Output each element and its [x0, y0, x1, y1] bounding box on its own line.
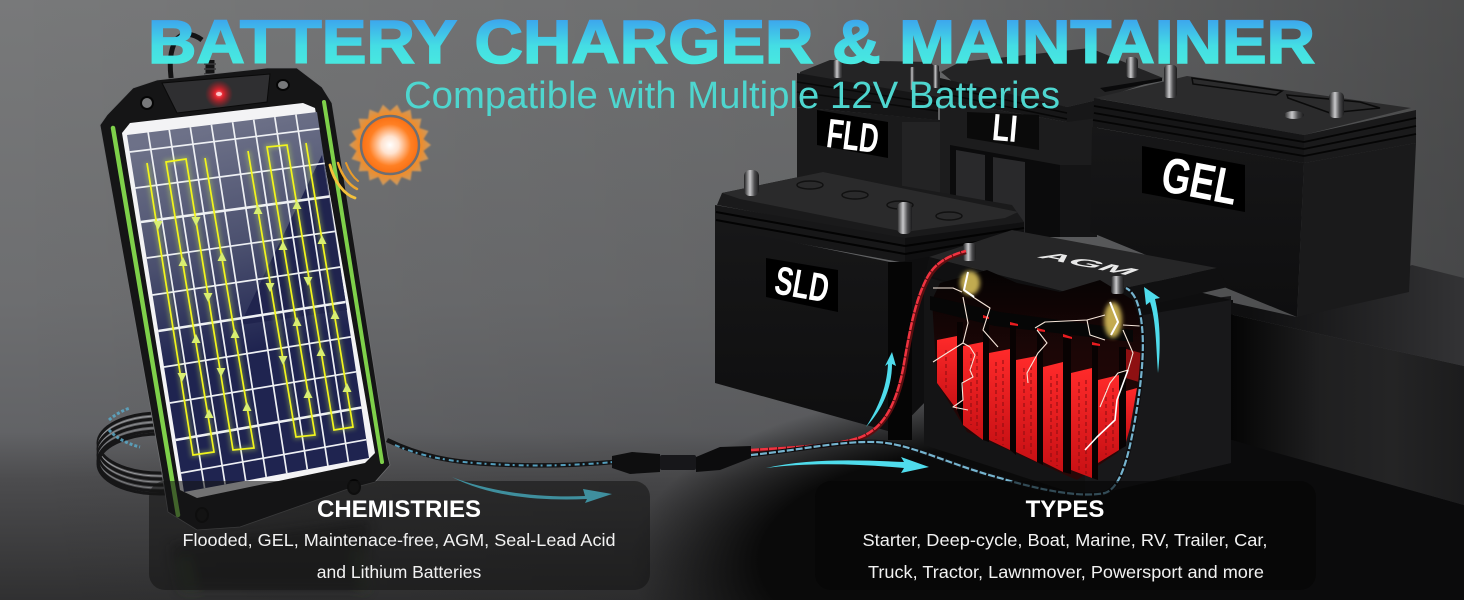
- diagonal dark reflection: [240, 155, 347, 325]
- frame: [100, 68, 390, 530]
- cable: blue: [751, 288, 1143, 495]
- text: chemistries second line: and Lithium Batteries: [317, 562, 481, 582]
- battery: LI: [940, 48, 1163, 237]
- heading: chemistries: CHEMISTRIES: [317, 496, 481, 523]
- lightning: [933, 271, 1140, 450]
- label: SLD: SLD: [772, 259, 832, 311]
- solar cells: [127, 112, 369, 492]
- solar panel: [100, 34, 390, 530]
- arrow: cyan up blue cable: [1144, 287, 1160, 373]
- battery: SLD: [715, 170, 1024, 440]
- battery: FLD: [797, 60, 940, 235]
- plate traces: [946, 350, 1113, 474]
- label: LI: LI: [991, 107, 1019, 151]
- text: types second line: Truck, Tractor, Lawnmover, Powersport and more: [868, 562, 1264, 582]
- green side strips: [113, 102, 382, 515]
- title: BATTERY CHARGER & MAINTAINER: [148, 8, 1315, 76]
- yellow circuit lines: [147, 143, 353, 455]
- label: SLD: [766, 258, 838, 312]
- text: chemistries list: Flooded, GEL, Maintenace-free, AGM, Seal-Lead Acid: [182, 530, 616, 550]
- corner mount holes: [141, 80, 360, 522]
- cell grid: [130, 115, 366, 488]
- panel reflection: [170, 520, 370, 590]
- box background: [815, 481, 1316, 590]
- terminals: AGM: [963, 243, 1124, 294]
- arrow: cyan up red cable: [866, 352, 896, 427]
- subtitle: Compatible with Multiple 12V Batteries: [404, 75, 1060, 117]
- label: LI: [967, 107, 1039, 151]
- connector: [612, 446, 751, 474]
- panel: chemistries: [149, 477, 650, 590]
- top band with LED: [162, 74, 270, 113]
- box background: [149, 481, 650, 590]
- white glass border: [122, 103, 375, 498]
- cutaway interior: [930, 270, 1142, 480]
- terminals: FLD: [833, 60, 939, 90]
- cords at top: [170, 34, 216, 84]
- cable coil behind panel: [98, 408, 222, 494]
- label: AGM: AGM: [1031, 250, 1146, 277]
- label: FLD: [817, 110, 888, 162]
- icon: sun: [349, 105, 431, 185]
- cable: red: [751, 251, 966, 451]
- red slivers: [983, 315, 1100, 346]
- label: GEL: [1142, 146, 1245, 216]
- terminals: GEL: [1164, 65, 1344, 119]
- label: FLD: FLD: [824, 110, 881, 162]
- battery: AGM cutaway: [924, 230, 1231, 497]
- text: types list: Starter, Deep-cycle, Boat, Marine, RV, Trailer, Car,: [862, 530, 1268, 550]
- red plates: [937, 336, 1137, 478]
- arrowheads on circuit: [154, 200, 352, 418]
- terminal: LI: [1100, 57, 1162, 92]
- panel: types: [815, 481, 1316, 590]
- label: GEL: GEL: [1157, 146, 1242, 216]
- arrow: cyan along floor: [766, 457, 929, 473]
- terminals: SLD: [744, 170, 912, 234]
- heading: types: TYPES: [1026, 496, 1104, 523]
- arrow: teal along cable: [452, 477, 612, 503]
- dark plate separators: [957, 315, 1126, 480]
- cable: panel to connector: [387, 440, 614, 465]
- battery: GEL: [1090, 65, 1416, 317]
- icon: sun rays on panel: [330, 163, 358, 198]
- dark platform at right: [1180, 265, 1464, 600]
